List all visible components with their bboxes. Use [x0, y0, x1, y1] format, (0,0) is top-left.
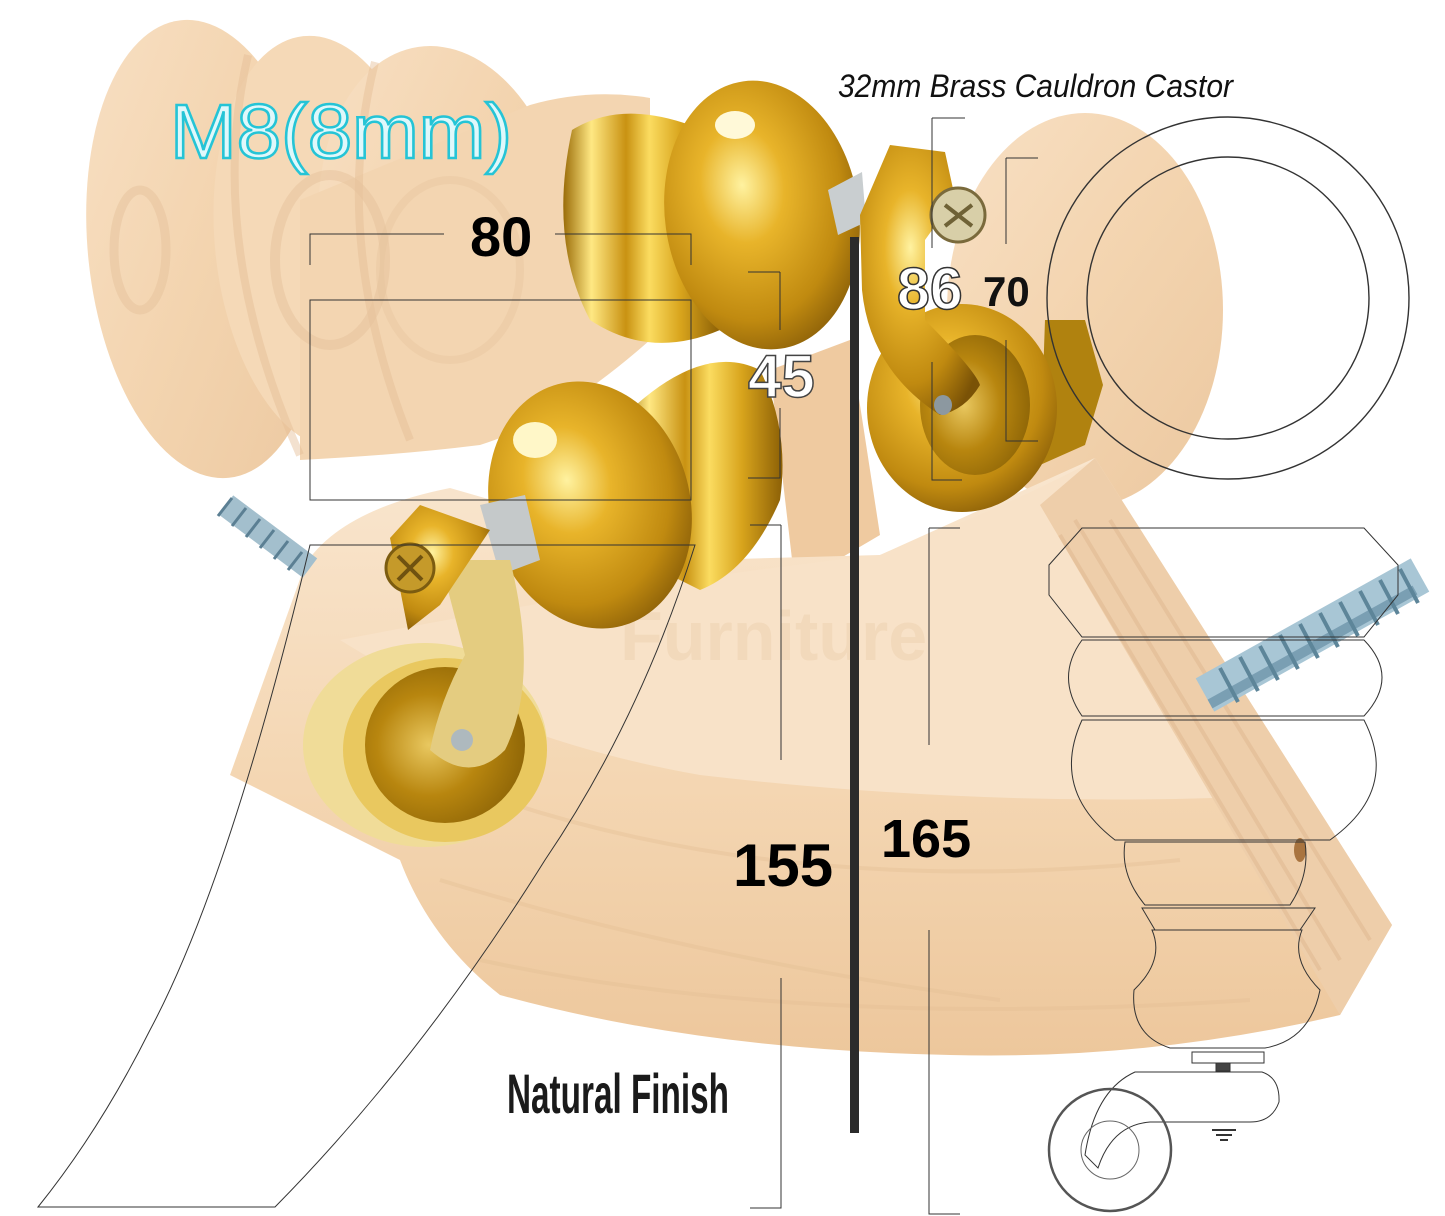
photo: back turned wooden leg	[65, 8, 650, 490]
dimension: 80: 80	[470, 205, 532, 268]
dimension: 165: 165	[881, 809, 971, 869]
photo: threaded bolt left	[218, 498, 310, 570]
dimension: 45: 45	[748, 343, 815, 410]
photo: watermark: Furniture	[620, 597, 927, 675]
drawing: front profile of turned leg with castor	[1049, 528, 1398, 1211]
drawing: castor circles top view	[1047, 117, 1409, 479]
photo: lower brass cup	[461, 358, 782, 652]
photo: lower castor wheel and bracket	[303, 505, 547, 847]
dimension: 70: 70	[983, 268, 1030, 315]
title: castor caption: 32mm Brass Cauldron Castor	[838, 68, 1234, 104]
dimension lines: thin brackets	[310, 118, 1038, 1214]
photo: front wedge wooden leg	[230, 458, 1392, 1056]
photo: right back wooden leg	[770, 113, 1223, 585]
label: natural finish: Natural Finish	[507, 1062, 729, 1125]
photo: threaded bolt right	[1205, 569, 1420, 704]
centre height bar	[850, 237, 859, 1133]
photo: upper brass cup	[563, 68, 877, 362]
drawing: side profile outline of leg	[38, 545, 695, 1207]
photo: upper castor wheel and bracket	[860, 145, 1103, 512]
dimension: 86: 86	[897, 256, 963, 322]
label: thread size: M8(8mm)	[170, 89, 512, 175]
dimension: 155: 155	[733, 832, 833, 899]
